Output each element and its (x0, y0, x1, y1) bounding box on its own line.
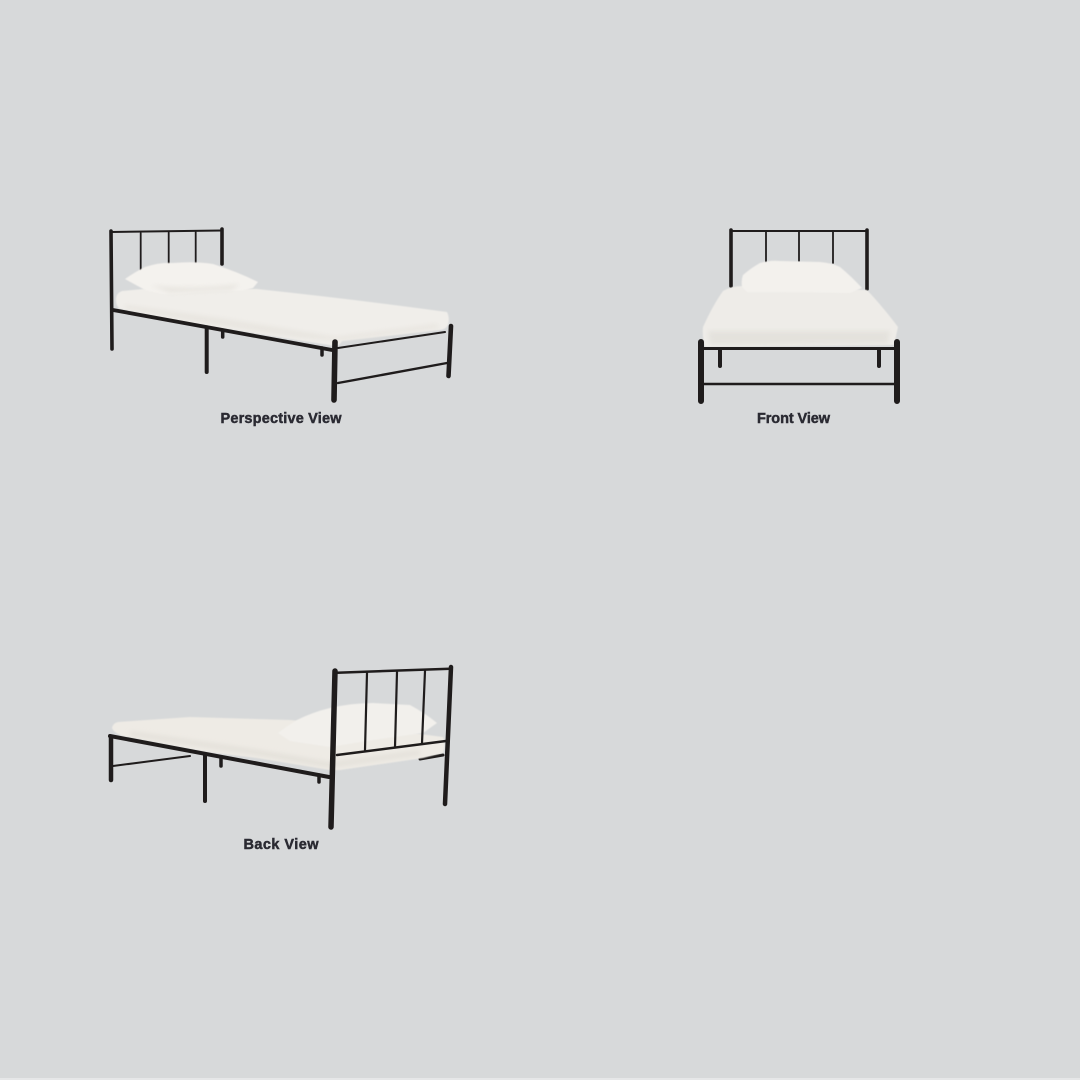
label: perspective view: Perspective View (220, 411, 342, 427)
label: front view: Front View (757, 411, 831, 427)
bed: front (701, 230, 898, 401)
label: back view: Back View (244, 837, 319, 853)
panel: perspective view (111, 229, 451, 427)
bed: perspective (111, 229, 451, 400)
bed: back (110, 667, 451, 827)
panel: front view (701, 230, 898, 427)
panel: back view (110, 667, 451, 853)
